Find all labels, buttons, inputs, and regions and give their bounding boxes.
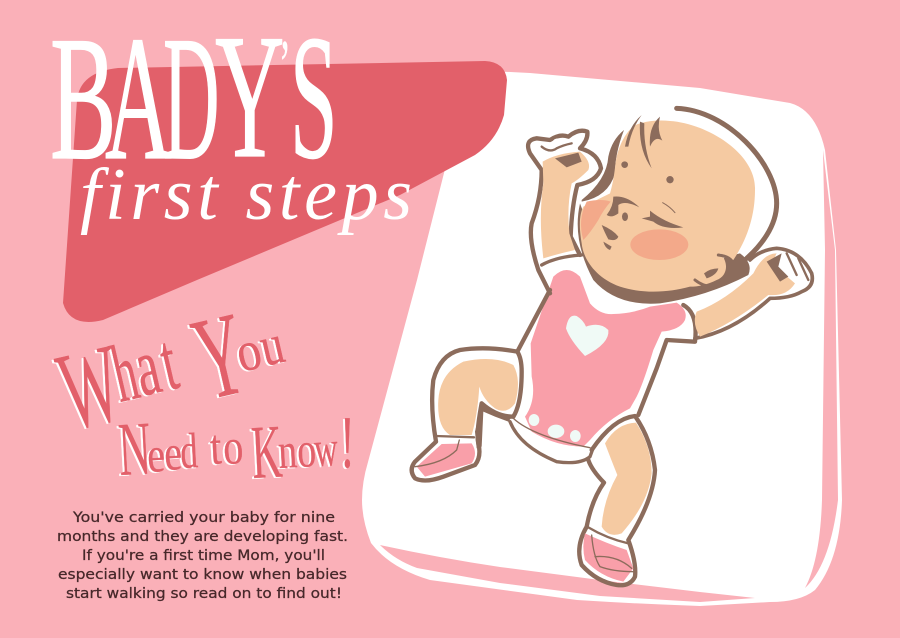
heading: Need to Know!: o bbox=[222, 419, 245, 475]
heading: Need to Know!: e bbox=[163, 425, 183, 481]
title: Baby's: S bbox=[290, 0, 338, 197]
forehead outline bbox=[582, 130, 624, 202]
title: Baby's: ’ bbox=[279, 26, 291, 103]
title: Baby's bbox=[50, 0, 338, 197]
heading: What You: a bbox=[126, 319, 168, 414]
hair tufts bbox=[625, 115, 662, 168]
heading: Need to Know!: e bbox=[146, 427, 166, 483]
title: Baby's: A bbox=[105, 0, 172, 197]
heading: Need to Know!: t bbox=[209, 419, 223, 475]
heading: Need to Know!: n bbox=[277, 423, 298, 479]
heading: What You bbox=[48, 287, 290, 454]
right cheek bbox=[630, 229, 688, 260]
facial features bbox=[602, 161, 683, 250]
ear bbox=[695, 255, 733, 287]
text block: introduction bbox=[57, 510, 348, 602]
heading: Need to Know!: d bbox=[179, 424, 199, 480]
heart bbox=[566, 316, 608, 356]
left cheek bbox=[581, 200, 611, 240]
text block: introduction: especially want to know when babies bbox=[58, 567, 347, 583]
text block: introduction: If you're a first time Mom, you'll bbox=[82, 548, 325, 564]
heading: What You: h bbox=[104, 327, 146, 420]
heading: What You: u bbox=[254, 313, 290, 378]
panel: red title backdrop bbox=[63, 61, 507, 322]
text block: introduction: start walking so read on to find out! bbox=[66, 586, 342, 602]
title: Baby's: B bbox=[50, 0, 116, 197]
heading: Need to Know!: ! bbox=[340, 403, 355, 484]
panel: white blanket card bbox=[362, 70, 842, 606]
baby upper body and head bbox=[528, 108, 812, 338]
heading: Need to Know!: K bbox=[249, 410, 284, 495]
left leg bbox=[412, 348, 522, 480]
text block: introduction: You've carried your baby for nine bbox=[72, 510, 335, 526]
right leg bbox=[579, 416, 655, 585]
title: Baby's: D bbox=[163, 0, 220, 197]
romper bbox=[510, 270, 696, 463]
snaps bbox=[529, 414, 581, 442]
right shoe bbox=[583, 527, 633, 582]
heading: Need to Know!: N bbox=[117, 407, 153, 492]
baby legs and romper bbox=[412, 270, 696, 585]
heading: What You: Y bbox=[182, 287, 258, 425]
heading: What You: t bbox=[152, 316, 186, 408]
title: Baby's: Y bbox=[215, 0, 284, 195]
heading: Need to Know!: o bbox=[296, 422, 317, 478]
text block: introduction: months and they are developing fast. bbox=[57, 529, 348, 545]
right arm bbox=[695, 248, 812, 338]
heading: Need to Know! bbox=[117, 403, 355, 495]
heading: What You: W bbox=[48, 322, 132, 454]
left arm bbox=[528, 131, 601, 293]
heading: Need to Know!: w bbox=[313, 421, 339, 478]
illustration: sleeping baby bbox=[412, 108, 812, 585]
heading: What You: o bbox=[230, 319, 267, 385]
left shoe bbox=[415, 436, 475, 477]
face bbox=[580, 121, 755, 292]
head outline bbox=[677, 108, 777, 258]
subtitle: first steps: first steps bbox=[80, 154, 412, 236]
chin shadow bbox=[578, 203, 750, 304]
